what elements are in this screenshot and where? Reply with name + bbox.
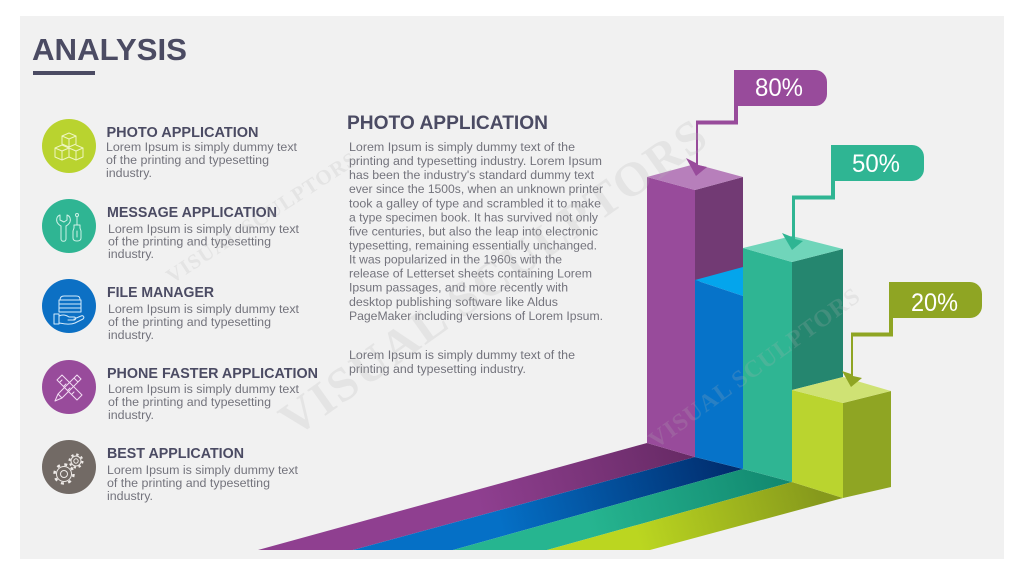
heading: MESSAGE APPLICATION [107,205,277,221]
text block: Lorem Ipsum is simply dummy text [106,140,298,154]
text block: main paragraph [349,140,603,323]
callout: 50%: 50% [852,150,900,178]
text block: main paragraph: typesetting, remaining essentially unchanged. [349,238,597,252]
bar: blue [695,267,743,469]
floor stripes [258,443,843,550]
heading: FILE MANAGER [107,285,215,301]
text block: main paragraph: took a galley of type and scrambled it to make [349,196,601,210]
text block: industry. [108,328,154,342]
watermark [162,109,865,454]
text block: Lorem Ipsum is simply dummy text [108,382,300,396]
text block: Lorem Ipsum is simply dummy text [108,222,300,236]
icon: hand with stack [42,279,96,333]
text block: of the printing and typesetting [108,395,271,409]
text block: Lorem Ipsum is simply dummy text [108,302,300,316]
list item: message application [42,199,300,261]
bar: lime 20% [792,377,891,498]
text block: main paragraph: It was popularized in the 1960s with the [349,253,562,267]
bar: purple 80% [647,164,743,457]
callout: 80%: 80% [755,74,803,102]
heading: PHOTO APPLICATION [106,125,258,141]
text block: Lorem Ipsum is simply dummy text [107,463,299,477]
text block: industry. [107,489,153,503]
text block [108,382,300,422]
text block: main paragraph: Ipsum passages, and more recently with [349,281,568,295]
list item: phone faster application [42,360,318,422]
icon: pencil and ruler [42,360,96,414]
text block: second paragraph: printing and typesetting industry. [349,362,526,376]
list item: photo application [42,119,298,180]
text block: of the printing and typesetting [108,234,271,248]
list item: best application [42,440,299,503]
watermark: VISUAL SCULPTORS [270,109,717,447]
icon: tools [42,199,96,253]
heading: PHOTO APPLICATION [347,112,548,134]
icon: cubes [42,119,96,173]
text block: industry. [108,408,154,422]
text block [108,222,300,261]
callout: 80% [686,70,827,176]
panel: detail text [347,112,603,376]
text block: main paragraph: release of Letterset sheets containing Lorem [349,267,592,281]
watermark: VISUAL SCULPTORS [162,147,361,288]
title: ANALYSIS [32,32,187,67]
text block: second paragraph [349,348,575,376]
watermark: VISUAL SCULPTORS [644,284,865,454]
text block: of the printing and typesetting [108,315,271,329]
text block: main paragraph: ever since the 1500s, when an unknown printer [349,182,603,196]
text block: industry. [106,166,152,180]
text block: main paragraph: printing and typesetting industry. Lorem Ipsum [349,154,602,168]
text block: main paragraph: PageMaker including versions of Lorem Ipsum. [349,309,603,323]
text block: main paragraph: a type specimen book. It has survived not only [349,210,599,224]
text block: main paragraph: desktop publishing software like Aldus [349,295,558,309]
text block: main paragraph: five centuries, but also the leap into electronic [349,224,598,238]
text block [107,463,299,503]
heading: BEST APPLICATION [107,446,244,462]
text block [106,140,298,180]
text block: of the printing and typesetting [107,476,270,490]
text block: main paragraph: Lorem Ipsum is simply dummy text of the [349,140,575,154]
text block [108,302,300,342]
text block: of the printing and typesetting [106,153,269,167]
callout: 20% [842,282,982,387]
callout: 20%: 20% [911,289,958,317]
text block: industry. [108,247,154,261]
heading: PHONE FASTER APPLICATION [107,366,318,382]
list item: file manager [42,279,300,342]
chart: 3D bars [258,164,891,550]
text block: main paragraph: has been the industry's standard dummy text [349,168,595,182]
text block: second paragraph: Lorem Ipsum is simply dummy text of the [349,348,575,362]
callout: 50% [782,145,924,250]
bar: green 50% [743,236,843,482]
icon: gears [42,440,96,494]
